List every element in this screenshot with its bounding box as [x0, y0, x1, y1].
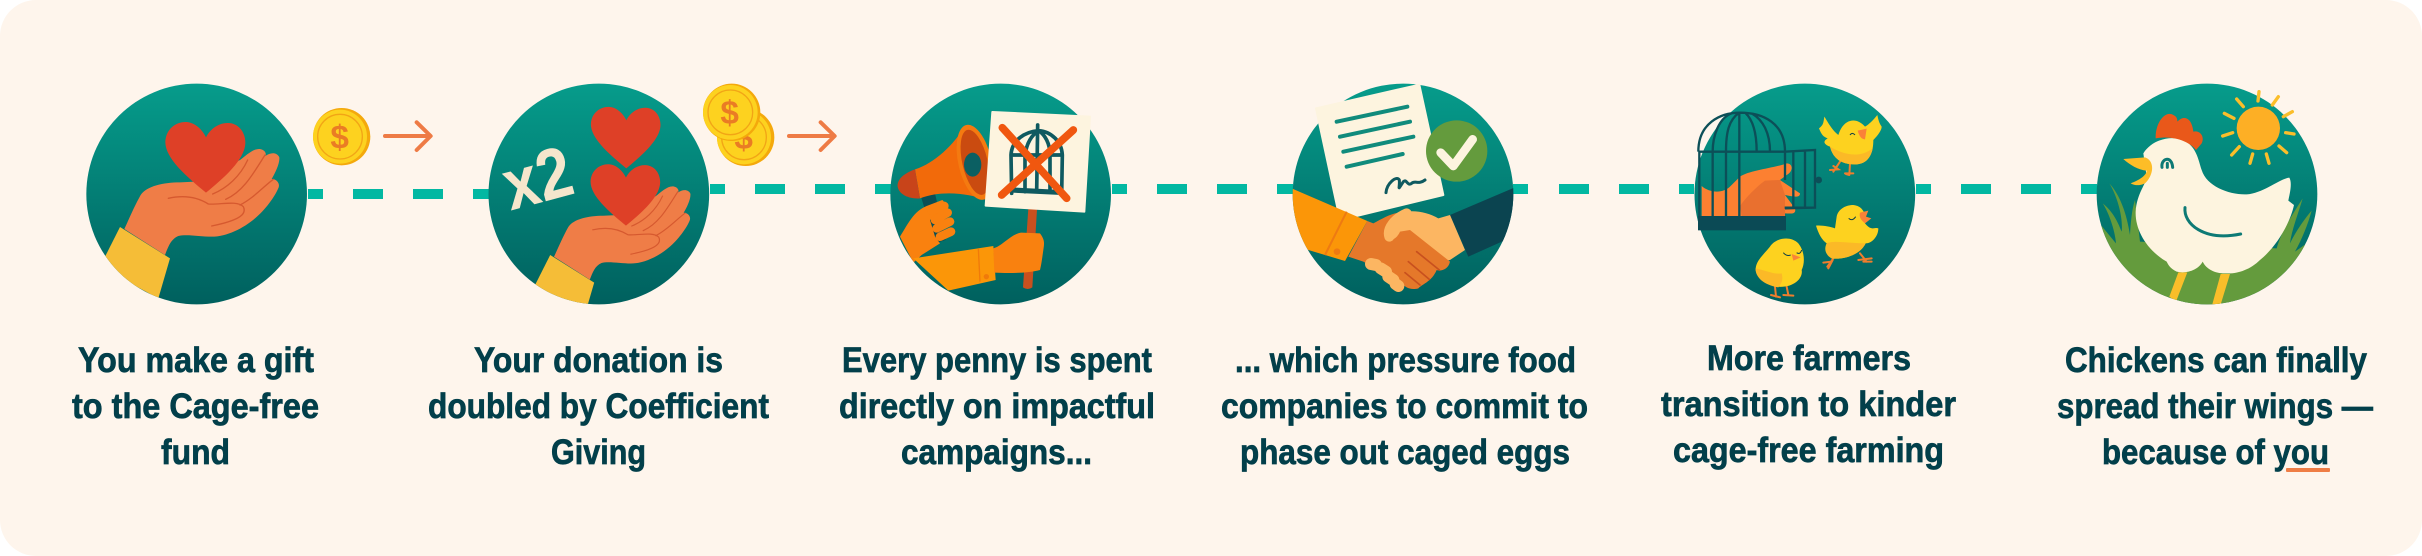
text: step 6: spread their wings — — [2057, 387, 2373, 426]
text: step 5: transition to kinder — [1661, 385, 1956, 424]
text: step 3: Every penny is spent — [842, 341, 1152, 380]
text: step 4: companies to commit to — [1221, 387, 1588, 426]
text: step 5 — [1661, 339, 1956, 470]
icon: megaphone and protest sign — [890, 84, 1111, 304]
arrow — [385, 122, 431, 150]
icon: two gold coins — [703, 84, 774, 166]
icon: gold coin: $ — [330, 119, 349, 156]
text: step 3 — [839, 341, 1155, 472]
text: step 1: fund — [161, 433, 230, 472]
icon: x2 hearts and hand — [488, 84, 709, 318]
text: step 6 — [2057, 341, 2373, 472]
text: step 2: Your donation is — [474, 341, 723, 380]
text: step 4 — [1221, 341, 1588, 472]
text: step 3: directly on impactful — [839, 387, 1155, 426]
text: step 4: ... which pressure food — [1235, 341, 1576, 380]
text: step 5: More farmers — [1707, 339, 1911, 378]
text: step 6: because of you — [2102, 433, 2329, 472]
text: step 1: You make a gift — [78, 341, 314, 380]
text: step 3: campaigns... — [901, 433, 1092, 472]
text: step 1: to the Cage-free — [72, 387, 319, 426]
icon: happy hen, sun and grass — [2090, 84, 2323, 310]
text: step 2: doubled by Coefficient — [428, 387, 769, 426]
text: step 6: Chickens can finally — [2065, 341, 2367, 380]
icon: hand holding heart — [86, 84, 307, 304]
icon: two gold coins: $ — [720, 95, 739, 132]
text: step 1 — [72, 341, 319, 472]
icon: open cage and chicks — [1694, 84, 1915, 304]
icon: two gold coins: $ — [734, 120, 753, 157]
icon: x2 hearts and hand: x2 — [494, 132, 581, 226]
icon: contract and handshake — [1290, 84, 1517, 304]
text: step 2 — [428, 341, 769, 472]
text: step 5: cage-free farming — [1673, 431, 1944, 470]
text: step 4: phase out caged eggs — [1240, 433, 1570, 472]
text: step 2: Giving — [551, 433, 646, 472]
icon: gold coin — [313, 108, 370, 165]
underline on "you" — [2286, 468, 2330, 472]
arrow — [789, 122, 835, 150]
dashed connector line — [308, 184, 2097, 199]
